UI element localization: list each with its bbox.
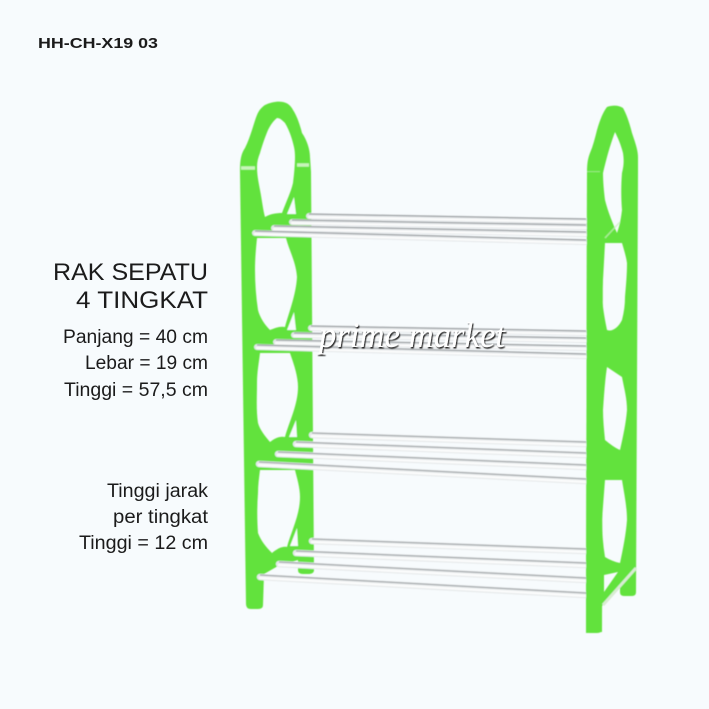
shelf tier 1 rods (255, 214, 586, 243)
shoe rack photo (240, 102, 638, 633)
shelf tier 4 rods (260, 539, 586, 596)
dimensions text: Panjang = 40 cm (63, 327, 208, 348)
dimensions text: Lebar = 19 cm (85, 353, 208, 374)
product code label: HH-CH-X19 03 (38, 35, 158, 52)
dimensions text (63, 327, 208, 401)
shelf tier 3 rods (259, 433, 586, 482)
title: RAK SEPATU (53, 259, 208, 286)
left frame gaps (287, 197, 298, 546)
tier spacing text: Tinggi = 12 cm (79, 533, 208, 554)
tier spacing text (79, 481, 209, 554)
title (53, 259, 208, 314)
tier spacing text: per tingkat (113, 507, 209, 528)
watermark: prime market (316, 315, 506, 355)
tier spacing text: Tinggi jarak (107, 481, 209, 502)
right frame highlights (587, 172, 620, 238)
right green frame (586, 106, 638, 633)
left frame highlights (241, 165, 309, 168)
shelf tier 2 rods (257, 326, 586, 357)
front post over rods (586, 172, 603, 633)
title: 4 TINGKAT (76, 287, 208, 314)
left green frame (240, 102, 314, 609)
dimensions text: Tinggi = 57,5 cm (64, 380, 208, 401)
